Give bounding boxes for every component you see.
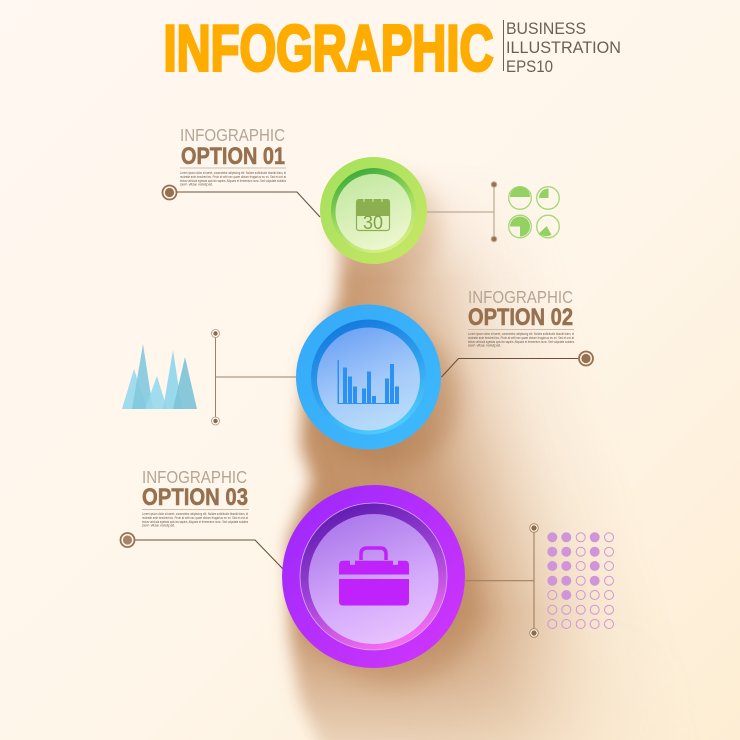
- panel: option 02 text: INFOGRAPHIC: [468, 287, 573, 307]
- subtitle: [503, 20, 621, 76]
- panel: option 03 text: INFOGRAPHIC: [142, 467, 247, 487]
- circle: option 02: [296, 304, 441, 450]
- panel: option 01 text: lectus vehicula egestas quis leo sapien. Aliquam et fermentum nunc. Sed vulputate sodales: [180, 179, 286, 183]
- panel: option 01 text: sem vitae volutpat.: [180, 183, 213, 187]
- connector: mountain group: [212, 330, 296, 425]
- panel: option 02 text: sem vitae volutpat.: [468, 344, 501, 348]
- panel: option 02 text: [468, 287, 574, 348]
- icon: pie charts: [509, 187, 559, 238]
- panel: option 03 text: lectus vehicula egestas quis leo sapien. Aliquam et fermentum nunc. Sed vulputate sodales: [142, 520, 248, 524]
- subtitle: EPS10: [506, 58, 553, 76]
- panel: option 02 text: Lorem ipsum dolor sit amet, consectetur adipiscing elit. Nullam sollicitudin blandit diam, id: [468, 332, 574, 336]
- connector: option 02: [442, 352, 593, 377]
- panel: option 02 text: molestie ante hendrerit eu. Proin at velit nec quam dictum feugiat ac eu mi. Sed et orci at: [468, 336, 574, 340]
- panel: option 01 text: Lorem ipsum dolor sit amet, consectetur adipiscing elit. Nullam sollicitudin blandit diam, id: [180, 171, 286, 175]
- panel: option 02 text: OPTION 02: [468, 304, 573, 331]
- icon: mountain chart: [122, 344, 197, 409]
- connector: pie group: [427, 182, 497, 242]
- icon: dot grid: [548, 533, 614, 628]
- subtitle: BUSINESS: [506, 20, 586, 38]
- panel: option 03 text: Lorem ipsum dolor sit amet, consectetur adipiscing elit. Nullam sollicitudin blandit diam, id: [142, 512, 248, 516]
- subtitle: ILLUSTRATION: [506, 39, 621, 57]
- circle: option 01: [320, 157, 427, 264]
- icon: bar chart: [338, 360, 399, 404]
- circle: option 03: [282, 485, 465, 668]
- connector: option 01: [162, 186, 320, 217]
- connector: option 03: [120, 533, 283, 569]
- panel: option 01 text: molestie ante hendrerit eu. Proin at velit nec quam dictum feugiat ac eu mi. Sed et orci at: [180, 175, 286, 179]
- panel: option 03 text: sem vitae volutpat.: [142, 524, 175, 528]
- panel: option 02 text: lectus vehicula egestas quis leo sapien. Aliquam et fermentum nunc. Sed vulputate sodales: [468, 340, 574, 344]
- panel: option 01 text: [180, 125, 286, 187]
- connector: dot grid: [464, 524, 538, 637]
- panel: option 03 text: molestie ante hendrerit eu. Proin at velit nec quam dictum feugiat ac eu mi. Sed et orci at: [142, 516, 248, 520]
- panel: option 01 text: INFOGRAPHIC: [180, 125, 285, 145]
- panel: option 03 text: [142, 467, 249, 528]
- panel: option 03 text: OPTION 03: [142, 484, 248, 511]
- icon: briefcase: [339, 548, 409, 606]
- icon: calendar: 30: [363, 213, 383, 234]
- title: INFOGRAPHIC: [164, 12, 494, 84]
- circle shadows: [276, 168, 622, 740]
- panel: option 01 text: OPTION 01: [181, 143, 285, 170]
